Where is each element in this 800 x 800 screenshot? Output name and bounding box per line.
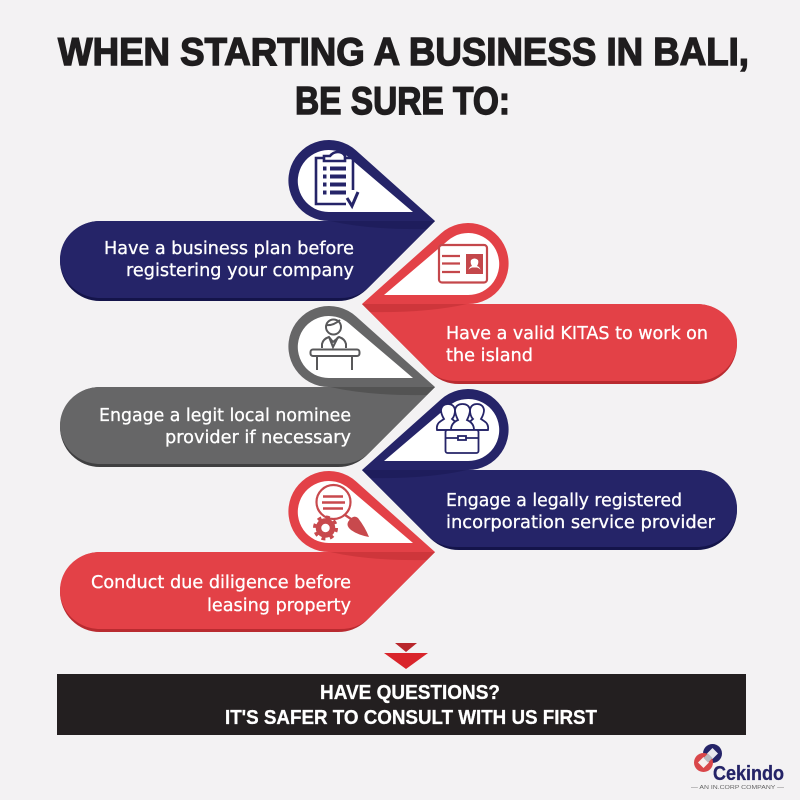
text: business plan — [104, 238, 354, 281]
icon: logo mark — [694, 744, 722, 772]
text: incorporation provider — [446, 490, 716, 533]
ribbon shape — [362, 389, 737, 550]
text: KITAS — [446, 323, 708, 366]
text: nominee: provider if necessary — [165, 427, 351, 448]
icon: clipboard checklist — [316, 152, 358, 206]
callout banner: HAVE QUESTIONS? — [320, 682, 500, 704]
ribbon shape — [60, 471, 435, 632]
ribbon shape — [60, 306, 435, 467]
text: due diligence: Conduct due diligence before — [91, 572, 351, 593]
panel: due diligence — [60, 471, 435, 632]
ribbon shape — [60, 140, 435, 301]
arrow: double down triangles — [384, 643, 428, 669]
icon: team with briefcase — [437, 404, 488, 453]
text: incorporation provider: incorporation service provider — [446, 512, 716, 533]
text: KITAS: Have a valid KITAS to work on — [446, 323, 708, 344]
panel: KITAS — [362, 223, 737, 384]
title: BE SURE TO: — [295, 80, 510, 123]
icon: nominee at desk — [310, 320, 360, 370]
text: nominee: Engage a legit local nominee — [99, 405, 351, 426]
callout banner: IT'S SAFER TO CONSULT WITH US FIRST — [225, 707, 597, 729]
text: KITAS: the island — [446, 345, 533, 366]
text: business plan: Have a business plan before — [104, 238, 354, 259]
text: incorporation provider: Engage a legally registered — [446, 490, 682, 511]
callout banner — [57, 674, 746, 735]
logo: Cekindo: Cekindo — [713, 763, 784, 785]
logo: Cekindo — [691, 744, 785, 791]
text: business plan: registering your company — [126, 260, 354, 281]
title — [58, 31, 749, 123]
text: nominee — [99, 405, 351, 448]
icon: magnifier and gear — [314, 485, 369, 539]
title: WHEN STARTING A BUSINESS IN BALI, — [58, 31, 749, 74]
text: due diligence: leasing property — [207, 595, 351, 616]
text: due diligence — [91, 572, 351, 616]
panel: nominee — [60, 306, 435, 467]
logo: Cekindo: — AN IN.CORP COMPANY — — [691, 785, 785, 791]
ribbon shape — [362, 223, 737, 384]
panel: incorporation provider — [362, 389, 737, 550]
icon: ID card — [439, 245, 487, 282]
panel: business plan — [60, 140, 435, 301]
